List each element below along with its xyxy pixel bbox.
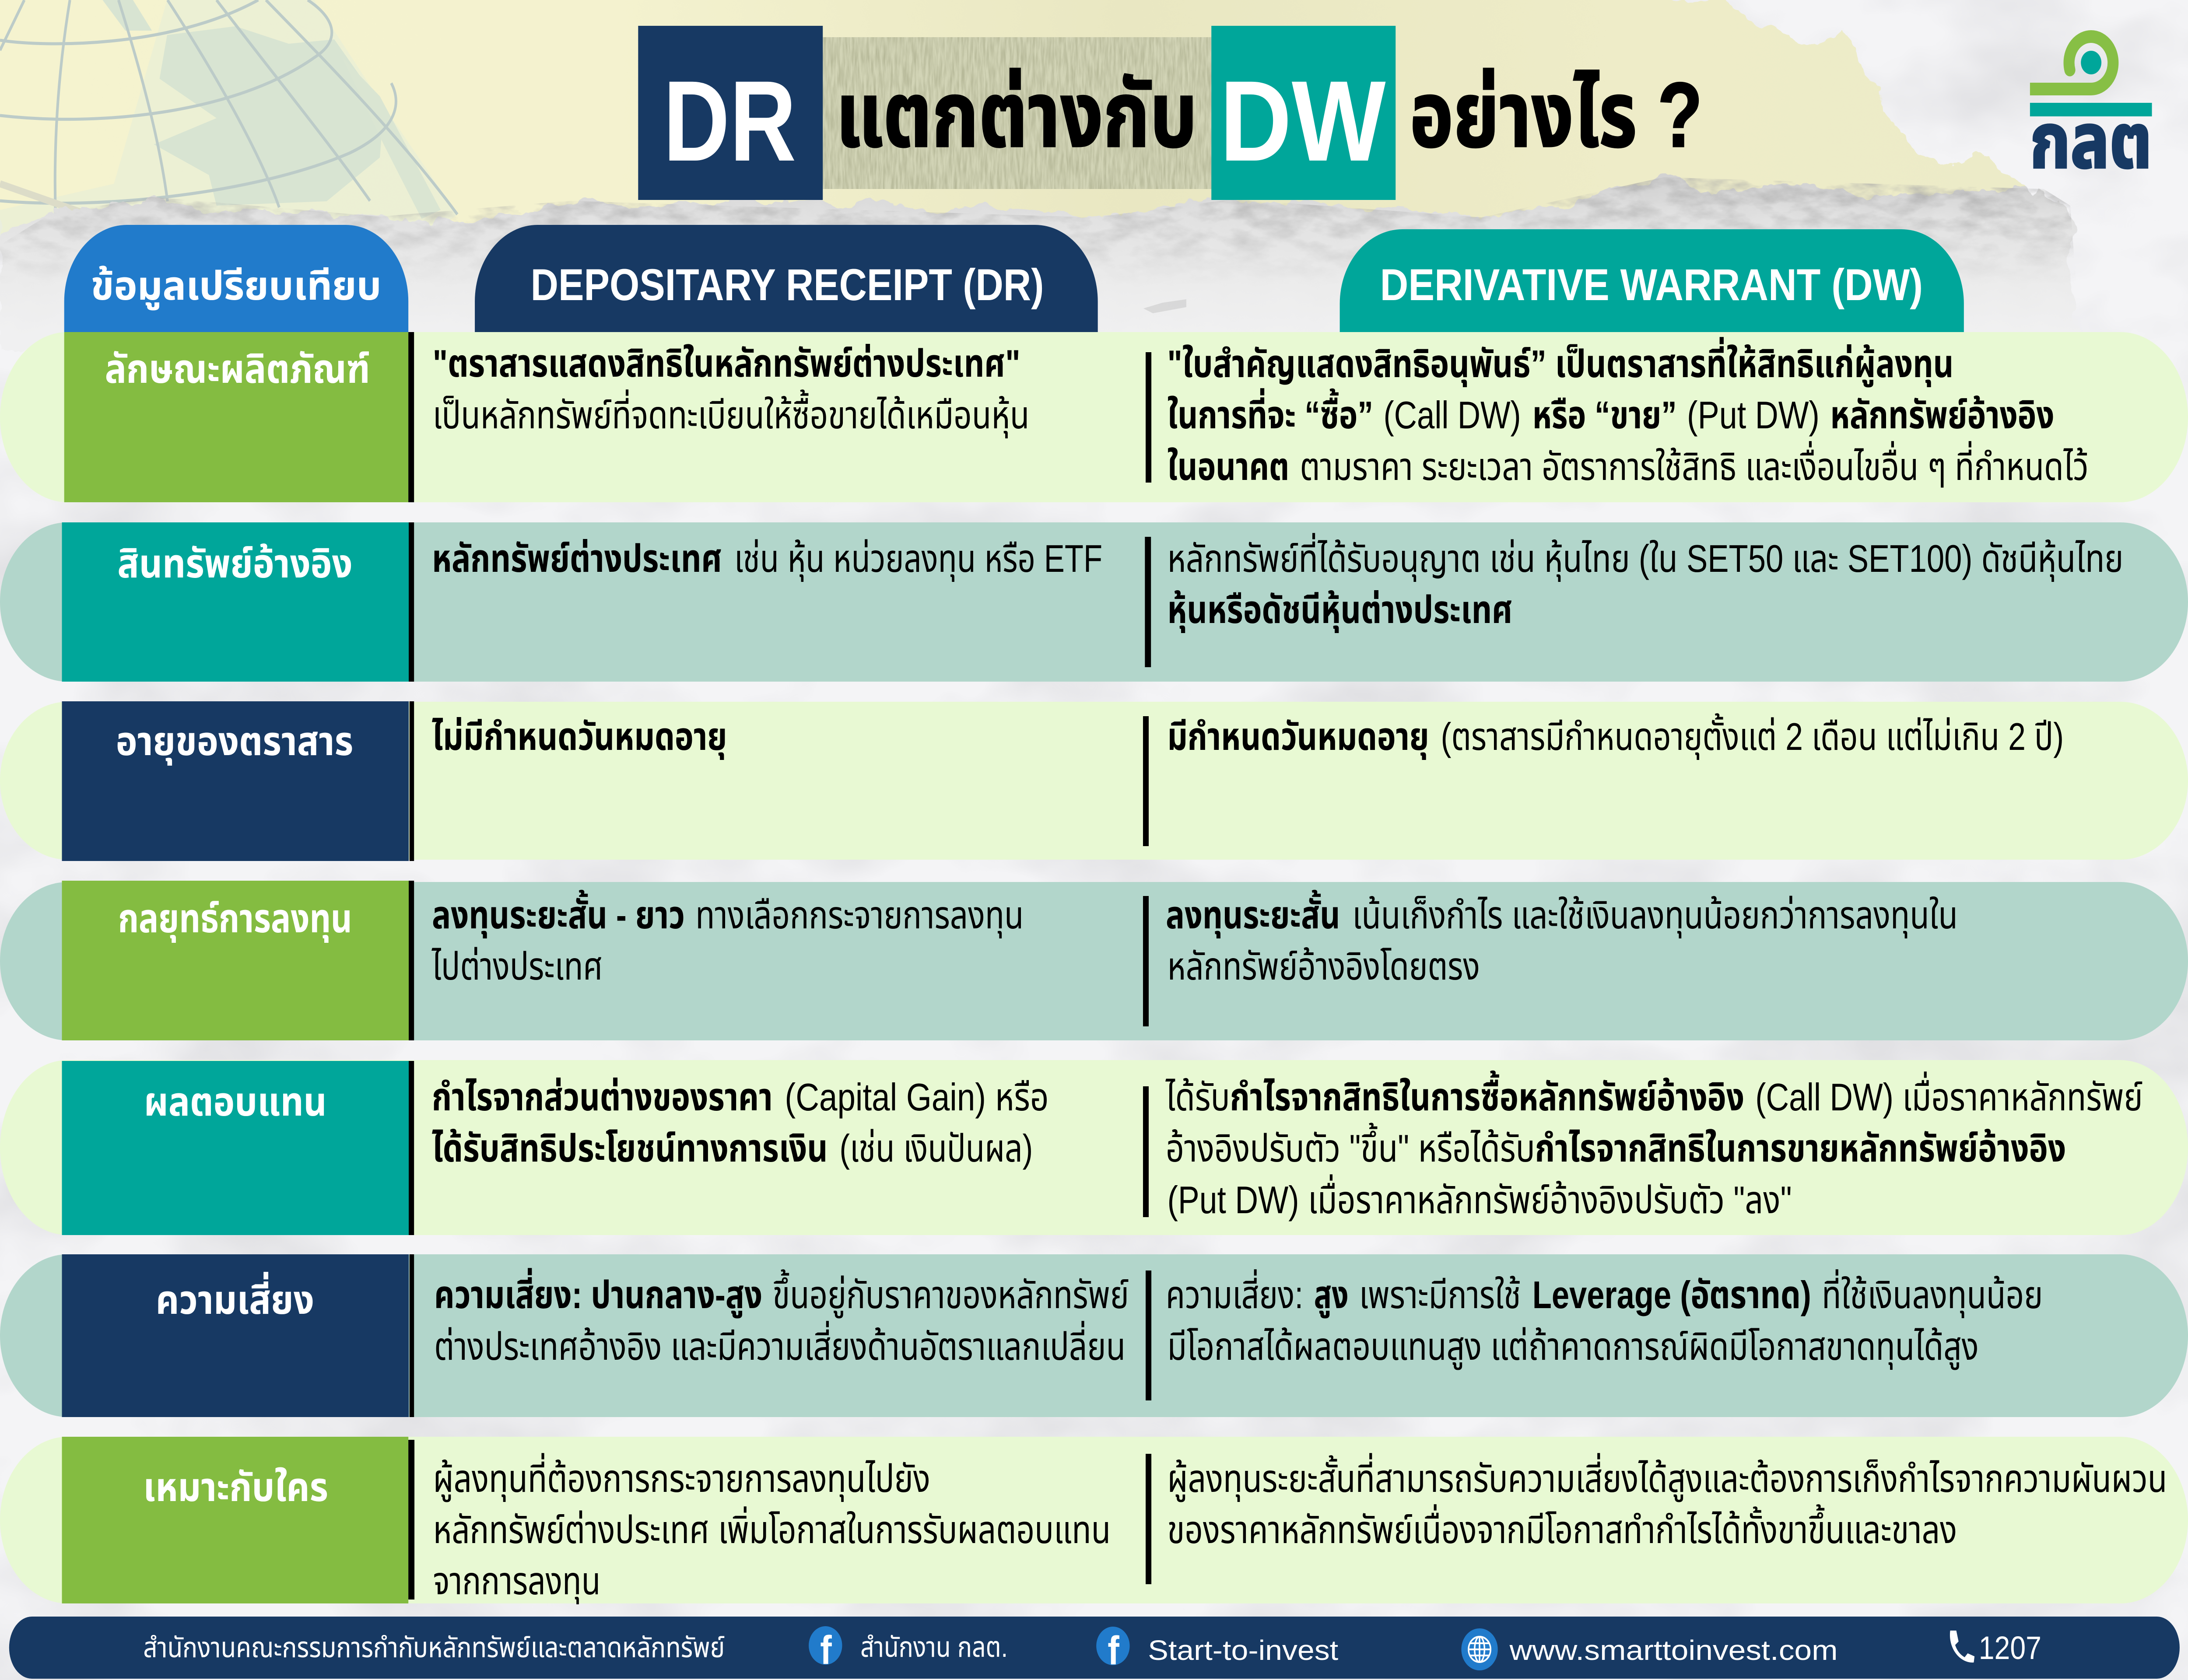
- row: returns: [0, 1060, 2188, 1235]
- DW text: กำไรจากสิทธิในการขายหลักทรัพย์อ้างอิง: [1535, 1127, 2066, 1170]
- footer: website: www.smarttoinvest.com: [1509, 1634, 1838, 1666]
- background: torn white paper lower sheet: [0, 177, 2078, 350]
- DW text: กำไรจากสิทธิในการซื้อหลักทรัพย์อ้างอิง: [1230, 1070, 1744, 1119]
- DW text: [1166, 889, 1958, 988]
- DR text: [434, 1268, 1129, 1368]
- footer bar: [9, 1617, 2180, 1679]
- DW text: ตามราคา ระยะเวลา อัตราการใช้สิทธิ และเงื่อนไขอื่น ๆ ที่กำหนดไว้: [1300, 441, 2089, 488]
- row: suitable for whom: [0, 1437, 2188, 1604]
- DR text: ต่างประเทศอ้างอิง และมีความเสี่ยงด้านอัตราแลกเปลี่ยน: [434, 1320, 1126, 1368]
- label cell: [64, 332, 408, 502]
- label cell: [62, 1061, 409, 1235]
- DW text: [1166, 1269, 2043, 1370]
- DR text: (Capital Gain) หรือ: [785, 1076, 1049, 1119]
- DW text: ความเสี่ยง:: [1166, 1269, 1303, 1316]
- DW text: (Call DW): [1383, 394, 1521, 437]
- row: product characteristics: [0, 332, 2188, 502]
- DR text: [433, 342, 1029, 438]
- DR text: ลงทุนระยะสั้น - ยาว: [432, 889, 685, 938]
- DW text: [1168, 532, 2123, 633]
- title badge: DW: DW: [1220, 57, 1386, 185]
- DR text: [431, 889, 1024, 988]
- logo: SEC Thailand: [2030, 37, 2152, 184]
- column header: DW: DERIVATIVE WARRANT (DW): [1380, 260, 1923, 310]
- title badge: DW: [1211, 26, 1396, 200]
- DW text: มีโอกาสได้ผลตอบแทนสูง แต่ถ้าคาดการณ์ผิดมีโอกาสขาดทุนได้สูง: [1168, 1325, 1979, 1370]
- label cell: [62, 1254, 409, 1417]
- DW text: (ตราสารมีกำหนดอายุตั้งแต่ 2 เดือน แต่ไม่เกิน 2 ปี): [1441, 713, 2064, 760]
- icon: facebook: f: [1108, 1628, 1119, 1673]
- DW text: อ้างอิงปรับตัว "ขึ้น" หรือได้รับ: [1166, 1122, 1535, 1170]
- DR text: "ตราสารแสดงสิทธิในหลักทรัพย์ต่างประเทศ": [433, 342, 1020, 385]
- row: instrument lifetime: [0, 701, 2188, 861]
- DW text: หลักทรัพย์อ้างอิงโดยตรง: [1168, 945, 1480, 988]
- footer: facebook page SEC: สำนักงาน กลต.: [860, 1631, 1008, 1663]
- DR text: [432, 537, 1102, 582]
- row: investment strategy: [0, 881, 2188, 1040]
- column header: DR: [475, 225, 1098, 332]
- masking tape behind title: [823, 37, 1211, 189]
- column header: comparison: [64, 225, 408, 332]
- DW text: [1168, 337, 2089, 488]
- background: torn cream paper: [0, 0, 2051, 332]
- DR text: ไม่มีกำหนดวันหมดอายุ: [432, 715, 727, 760]
- DW text: [1168, 1452, 2167, 1551]
- label cell: เหมาะกับใคร: [143, 1465, 328, 1510]
- DW text: (Put DW) เมื่อราคาหลักทรัพย์อ้างอิงปรับตัว "ลง": [1168, 1174, 1792, 1222]
- title band: [638, 26, 1703, 200]
- label cell: กลยุทธ์การลงทุน: [118, 896, 352, 942]
- DR text: ทางเลือกกระจายการลงทุน: [695, 894, 1024, 938]
- label cell: ความเสี่ยง: [156, 1272, 314, 1323]
- footer: facebook page start-to-invest: Start-to-invest: [1148, 1634, 1339, 1666]
- DR text: หลักทรัพย์ต่างประเทศ: [432, 537, 722, 580]
- title text: differs from: แตกต่างกับ: [836, 63, 1197, 166]
- title text: how?: อย่างไร ?: [1410, 63, 1703, 166]
- DW text: มีกำหนดวันหมดอายุ: [1168, 715, 1429, 760]
- logo wordmark: กลต: [2030, 98, 2152, 184]
- DW text: ลงทุนระยะสั้น: [1166, 889, 1340, 938]
- DR text: [432, 1076, 1049, 1170]
- DW text: ในอนาคต: [1168, 445, 1289, 488]
- DR text: เป็นหลักทรัพย์ที่จดทะเบียนให้ซื้อขายได้เหมือนหุ้น: [433, 389, 1029, 438]
- footer: organisation name: สำนักงานคณะกรรมการกำกับหลักทรัพย์และตลาดหลักทรัพย์: [143, 1632, 725, 1663]
- label cell: สินทรัพย์อ้างอิง: [117, 542, 353, 586]
- DW text: (Call DW) เมื่อราคาหลักทรัพย์: [1755, 1071, 2143, 1119]
- DW text: เน้นเก็งกำไร และใช้เงินลงทุนน้อยกว่าการลงทุนใน: [1352, 894, 1958, 938]
- DR text: ขึ้นอยู่กับราคาของหลักทรัพย์: [773, 1269, 1129, 1318]
- icon: facebook: [1096, 1627, 1130, 1673]
- column header: DW: [1340, 229, 1964, 332]
- logo swirl: [2030, 37, 2113, 95]
- decorative paper scrap: [1143, 299, 1186, 313]
- DW text: หลักทรัพย์อ้างอิง: [1830, 394, 2054, 437]
- DW text: ที่ใช้เงินลงทุนน้อย: [1822, 1269, 2043, 1318]
- column header: comparison: ข้อมูลเปรียบเทียบ: [91, 264, 382, 311]
- DR text: ความเสี่ยง: ปานกลาง-สูง: [434, 1268, 762, 1318]
- row: risk: [0, 1254, 2188, 1417]
- column header: DR: DEPOSITARY RECEIPT (DR): [531, 260, 1044, 310]
- DW text: ในการที่จะ “ซื้อ”: [1168, 388, 1373, 437]
- DR text: (เช่น เงินปันผล): [839, 1127, 1033, 1170]
- DW text: [1165, 1070, 2143, 1222]
- DW text: หลักทรัพย์ที่ได้รับอนุญาต เช่น หุ้นไทย (ใน SET50 และ SET100) ดัชนีหุ้นไทย: [1168, 532, 2123, 582]
- decorative globe: [0, 0, 457, 245]
- row: underlying asset: [0, 522, 2188, 682]
- label cell: [62, 701, 409, 861]
- label cell: [62, 1437, 408, 1603]
- DW text: หุ้นหรือดัชนีหุ้นต่างประเทศ: [1168, 588, 1513, 633]
- label cell: [62, 881, 409, 1040]
- DR text: [433, 1452, 1111, 1604]
- icon: phone: [1950, 1631, 1974, 1662]
- label cell: อายุของตราสาร: [116, 719, 353, 765]
- DR text: หลักทรัพย์ต่างประเทศ เพิ่มโอกาสในการรับผลตอบแทน: [433, 1506, 1111, 1551]
- DR text: กำไรจากส่วนต่างของราคา: [432, 1076, 773, 1119]
- DR text: ได้รับสิทธิประโยชน์ทางการเงิน: [432, 1127, 828, 1170]
- DW text: (Put DW): [1687, 394, 1820, 437]
- DR text: จากการลงทุน: [433, 1560, 600, 1604]
- footer: hotline: 1207: [1979, 1630, 2041, 1666]
- paper fibre mottling along the tear: [0, 177, 2073, 270]
- DW text: "ใบสำคัญแสดงสิทธิอนุพันธ์” เป็นตราสารที่ให้สิทธิแก่ผู้ลงทุน: [1168, 337, 1953, 387]
- title badge: DR: [638, 26, 823, 200]
- label cell: [62, 522, 409, 682]
- DW text: ผู้ลงทุนระยะสั้นที่สามารถรับความเสี่ยงได้สูงและต้องการเก็งกำไรจากความผันผวน: [1168, 1452, 2167, 1502]
- title badge: DR: DR: [663, 57, 796, 185]
- DW text: หรือ “ขาย”: [1532, 394, 1677, 437]
- DW text: ได้รับ: [1165, 1076, 1230, 1119]
- DW text: [1168, 713, 2064, 760]
- DR text: ผู้ลงทุนที่ต้องการกระจายการลงทุนไปยัง: [433, 1452, 930, 1502]
- logo bar: [2030, 103, 2152, 116]
- DR text: ไปต่างประเทศ: [431, 945, 603, 988]
- label cell: ผลตอบแทน: [144, 1080, 327, 1124]
- DW text: เพราะมีการใช้: [1359, 1274, 1521, 1316]
- icon: facebook: [809, 1626, 842, 1673]
- DR text: เช่น หุ้น หน่วยลงทุน หรือ ETF: [734, 537, 1102, 582]
- DW text: สูง: [1314, 1274, 1349, 1318]
- label cell: ลักษณะผลิตภัณฑ์: [105, 347, 370, 392]
- DW text: Leverage (อัตราทด): [1532, 1274, 1811, 1316]
- DW text: ของราคาหลักทรัพย์เนื่องจากมีโอกาสทำกำไรได้ทั้งขาขึ้นและขาลง: [1168, 1504, 1957, 1551]
- icon: facebook: f: [820, 1628, 832, 1673]
- icon: globe: [1461, 1628, 1498, 1670]
